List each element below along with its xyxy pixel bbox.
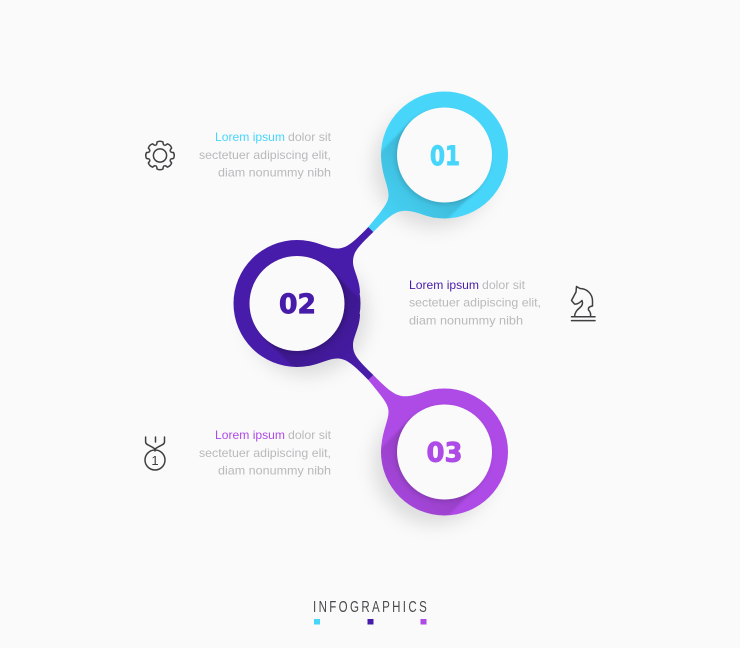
title: INFOGRAPHICS [313, 597, 427, 615]
text block 02: sectetuer adipiscing elit, [409, 296, 541, 310]
text block 03 [199, 428, 332, 478]
text block 01: sectetuer adipiscing elit, [199, 148, 331, 162]
node 02: inner disc [250, 256, 344, 351]
icon: gear [146, 141, 174, 170]
text block 01: dolor sit [288, 130, 332, 144]
node 01: inner disc [397, 108, 492, 202]
node 03: inner disc [397, 404, 492, 500]
text block 02: diam nonummy nibh [409, 314, 523, 328]
text block 03: diam nonummy nibh [218, 464, 331, 478]
text block 03: dolor sit [288, 428, 332, 442]
icon: medal [145, 437, 165, 470]
number 01: 01 [430, 141, 460, 172]
text block 02: Lorem ipsum [409, 278, 479, 292]
text block 01 [199, 130, 332, 180]
soft shadows behind rings [247, 107, 494, 524]
icon: medal: 1 [151, 453, 159, 468]
text block 03: sectetuer adipiscing elit, [199, 446, 331, 460]
node 03: purple ring [368, 375, 508, 516]
text block 01: diam nonummy nibh [218, 166, 331, 180]
number 02: 02 [279, 289, 316, 320]
text block 02 [409, 278, 541, 328]
node 01: cyan ring [368, 92, 508, 232]
icon: chess knight [572, 286, 595, 321]
number 03: 03 [426, 438, 462, 468]
text block 02: dolor sit [482, 278, 526, 292]
text block 03: Lorem ipsum [215, 428, 285, 442]
legend squares [314, 619, 426, 624]
text block 01: Lorem ipsum [215, 130, 285, 144]
node 02: indigo ring with connectors [234, 227, 374, 380]
